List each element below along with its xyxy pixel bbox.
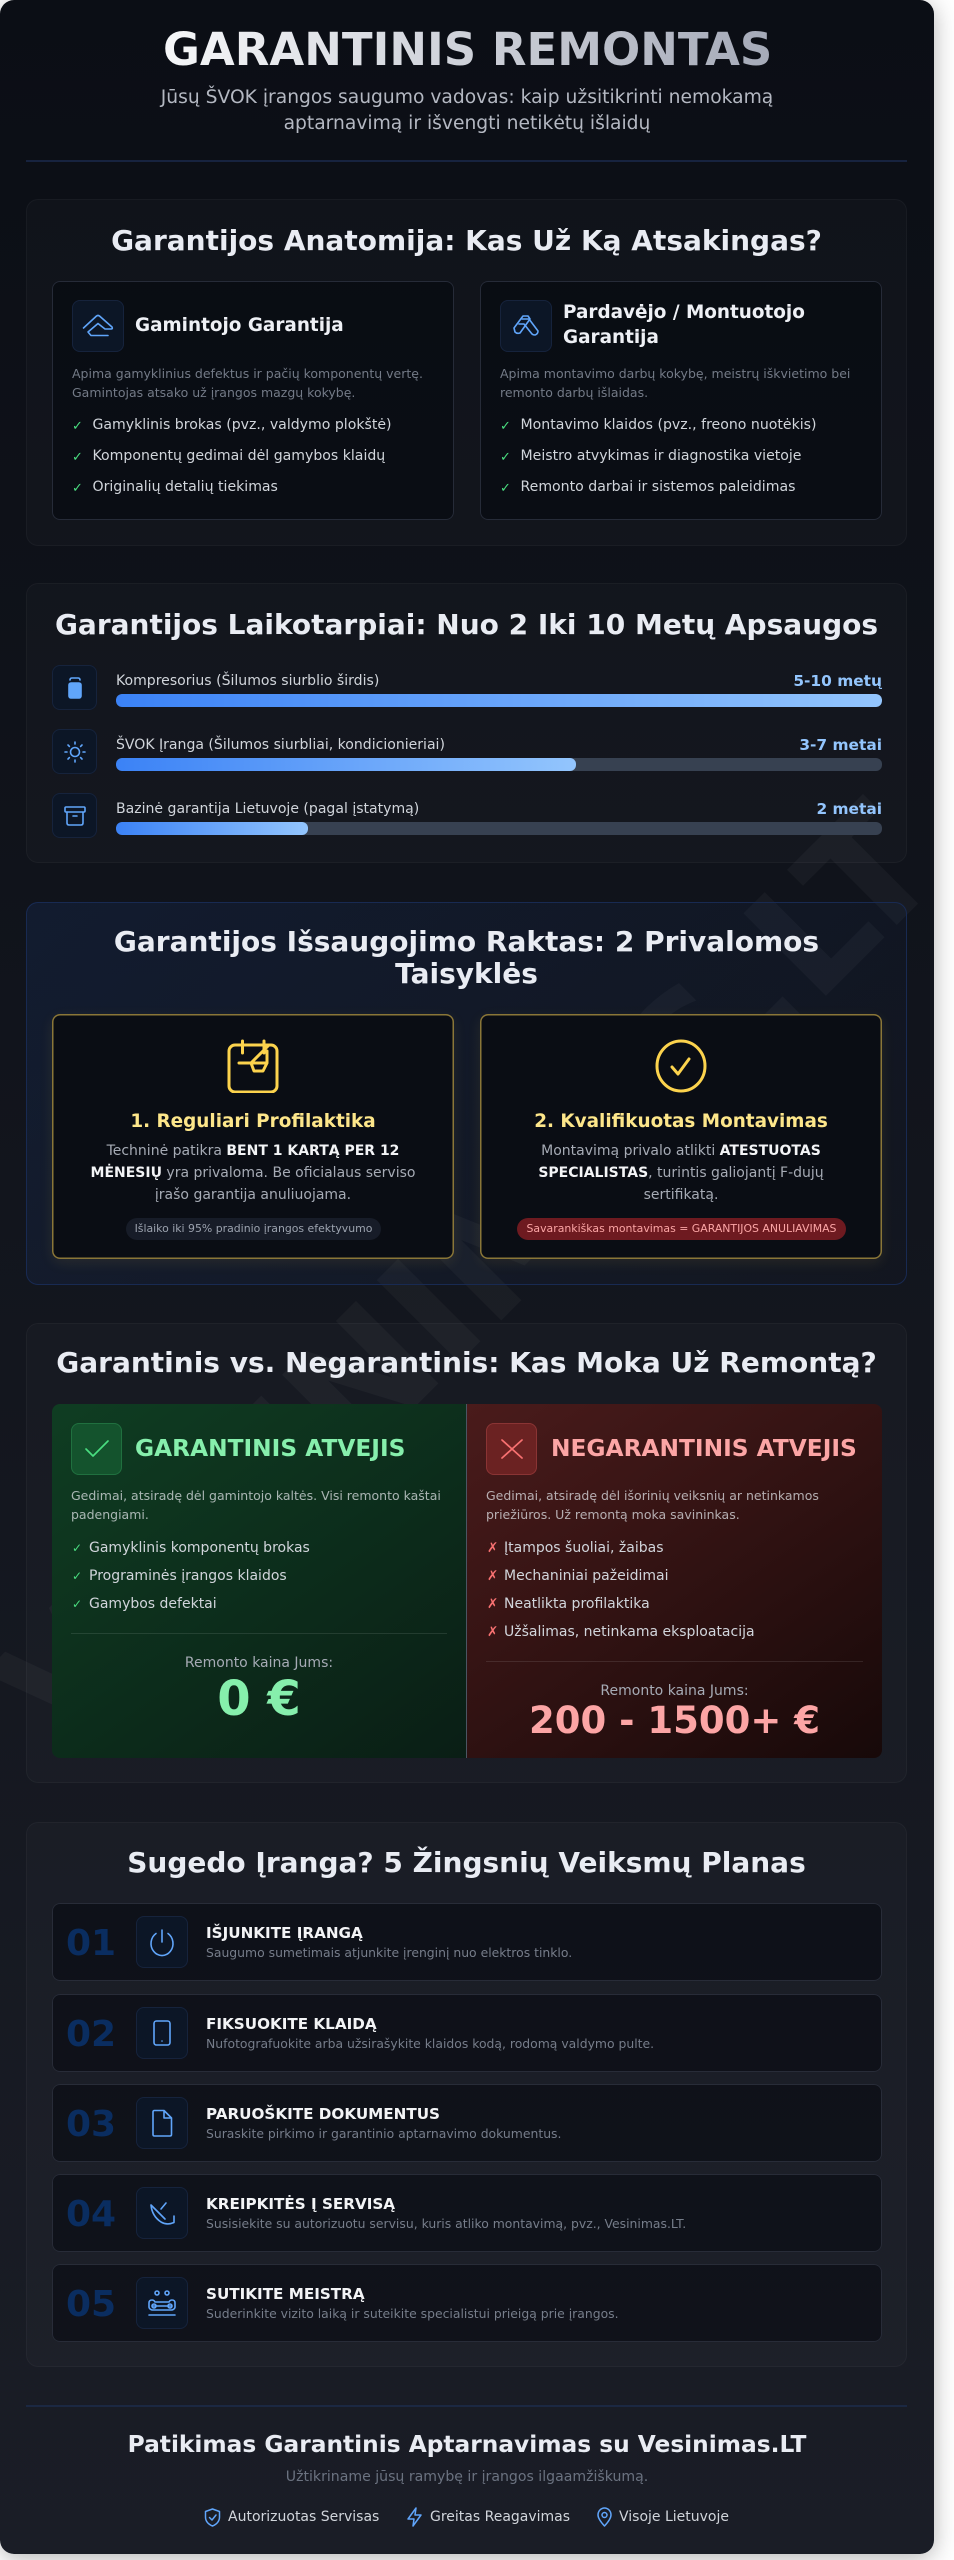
rule text: Montavimą privalo atlikti ATESTUOTAS [541,1143,821,1159]
price: 200 - 1500+ € [529,1699,820,1742]
rule text: Techninė patikra BENT 1 KARTĄ PER 12 [107,1143,399,1159]
rule title: 1. Reguliari Profilaktika [130,1111,376,1132]
step title: PARUOŠKITE DOKUMENTUS [206,2105,440,2123]
rule text: SPECIALISTAS, turintis galiojantį F-dujų [538,1165,824,1181]
price: 0 € [217,1671,301,1727]
bar [116,822,882,834]
item: ✓ [72,1597,82,1611]
footer badge: all of Lithuania [597,2507,729,2527]
card title [563,302,805,348]
description: Apima montavimo darbų kokybę, meistrų iškvietimo bei [500,366,850,381]
icon: lightning [407,2507,422,2527]
check item: ✓ [500,450,511,465]
check item: ✓ [500,419,511,434]
rule text: MĖNESIŲ yra privaloma. Be oficialaus serviso [91,1165,415,1181]
step text: Susisiekite su autorizuotu servisu, kuris atliko montavimą, pvz., Vesinimas.LT. [206,2216,686,2231]
pill note: Išlaiko iki 95% pradinio įrangos efektyvumo [135,1222,372,1235]
footer subtitle: Užtikriname jūsų ramybę ir įrangos ilgaamžiškumą. [286,2469,648,2485]
icon: phone [136,2007,188,2059]
panel: warranty vs non-warranty [26,1323,907,1783]
icon: technician car [136,2277,188,2329]
check item: Meistro atvykimas ir diagnostika vietoje [520,448,801,464]
column title: NEGARANTINIS ATVEJIS [551,1435,857,1462]
icon: check circle [656,1040,706,1092]
card: manufacturer warranty [52,281,454,520]
step text: Suraskite pirkimo ir garantinio aptarnavimo dokumentus. [206,2126,561,2141]
rule text [538,1143,824,1203]
value: 3-7 metai [799,736,882,754]
item text: Mechaniniai pažeidimai [504,1568,668,1584]
header title: GARANTINIS REMONTAS [163,23,772,76]
icon: sun [52,729,97,774]
icon: archive box [52,793,97,838]
badge text: Visoje Lietuvoje [619,2509,729,2525]
header subtitle: aptarnavimą ir išvengti netikėtų išlaidų [284,113,650,134]
price label: Remonto kaina Jums: [185,1655,333,1671]
check item: ✓ [72,419,83,434]
icon: installer [500,300,552,352]
description [72,366,423,400]
icon: compressor [52,665,97,710]
footer divider [26,2405,907,2407]
item text: Įtampos šuoliai, žaibas [504,1540,664,1556]
footer badge: authorized [204,2508,379,2527]
description [486,1488,819,1522]
icon: cross [486,1423,537,1475]
description: priežiūros. Už remontą moka savininkas. [486,1507,740,1522]
bar [116,694,882,706]
step 4 [52,2174,882,2252]
panel: five-step action plan [26,1822,907,2367]
item: ✗ [487,1568,498,1584]
step text: Nufotografuokite arba užsirašykite klaidos kodą, rodomą valdymo pulte. [206,2036,654,2051]
step 1 [52,1903,882,1981]
heading: Taisyklės [395,957,538,990]
check item: Komponentų gedimai dėl gamybos klaidų [92,448,385,464]
header subtitle: Jūsų ŠVOK įrangos saugumo vadovas: kaip užsitikrinti nemokamą [161,87,773,108]
step 3 [52,2084,882,2162]
check item: ✓ [72,450,83,465]
description: Apima gamyklinius defektus ir pačių komponentų vertę. [72,366,423,381]
price divider [486,1661,863,1662]
item: ✓ [72,1541,82,1555]
icon: shield [204,2508,220,2527]
pill warning [517,1218,846,1240]
pill note [126,1218,381,1240]
column title: GARANTINIS ATVEJIS [135,1435,405,1462]
description: Gedimai, atsiradę dėl išorinių veiksnių ar netinkamos [486,1488,819,1503]
description: remonto darbų išlaidas. [500,385,648,400]
card: rule 1 [52,1014,454,1259]
badge text: Greitas Reagavimas [430,2509,570,2525]
icon: manufacturer [72,300,124,352]
icon: check [71,1423,122,1475]
check item: ✓ [500,481,511,496]
description [71,1488,441,1522]
item: ✓ [72,1569,82,1583]
check item: ✓ [72,481,83,496]
price label: Remonto kaina Jums: [600,1683,749,1699]
heading: Garantijos Anatomija: Kas Už Ką Atsakingas? [111,224,822,257]
step title: KREIPKITĖS Į SERVISĄ [206,2195,395,2213]
description: Gamintojas atsako už įrangos mazgų kokybę. [72,385,355,400]
heading [114,925,819,990]
footer badge: fast response [407,2507,570,2527]
step number: 05 [66,2284,116,2325]
step number: 02 [66,2014,116,2055]
step number: 03 [66,2104,116,2145]
icon: document [136,2097,188,2149]
icon: location pin [597,2507,612,2527]
step 5 [52,2264,882,2342]
card title: Gamintojo Garantija [135,315,344,336]
column separator [466,1404,467,1758]
card: installer warranty [480,281,882,520]
check item: Remonto darbai ir sistemos paleidimas [520,479,795,495]
heading: Garantijos Išsaugojimo Raktas: 2 Privalomos [114,925,819,958]
header subtitle [160,86,773,134]
step 2 [52,1994,882,2072]
heading: Garantijos Laikotarpiai: Nuo 2 Iki 10 Metų Apsaugos [55,608,878,641]
panel: two mandatory rules [26,902,907,1285]
item text: Užšalimas, netinkama eksploatacija [504,1624,755,1640]
item text: Neatlikta profilaktika [504,1596,650,1612]
check item: Gamyklinis brokas (pvz., valdymo plokštė) [92,417,392,433]
value: 2 metai [816,800,882,818]
heading: Garantinis vs. Negarantinis: Kas Moka Už Remontą? [56,1346,877,1379]
item: ✗ [487,1624,498,1640]
rule text [91,1143,415,1203]
card title: Pardavėjo / Montuotojo [563,302,805,323]
rule text: sertifikatą. [644,1187,718,1203]
comparison block [52,1404,882,1758]
column: warranty case [52,1404,466,1758]
price divider [71,1633,447,1634]
bar [116,758,882,770]
card title: Garantija [563,326,659,348]
label: ŠVOK Įranga (Šilumos siurbliai, kondicionieriai) [116,737,445,753]
panel: warranty anatomy [26,199,907,546]
description: padengiami. [71,1507,149,1522]
value: 5-10 metų [793,672,882,690]
badge text: Autorizuotas Servisas [228,2509,379,2525]
step title: SUTIKITE MEISTRĄ [206,2285,365,2303]
icon: satellite dish [136,2187,188,2239]
check item: Montavimo klaidos (pvz., freono nuotėkis) [520,417,816,433]
item text: Gamyklinis komponentų brokas [89,1540,310,1556]
step number: 04 [66,2194,116,2235]
label: Kompresorius (Šilumos siurblio širdis) [116,673,379,689]
step number: 01 [66,1923,116,1964]
item: ✗ [487,1540,498,1556]
footer heading: Patikimas Garantinis Aptarnavimas su Vesinimas.LT [128,2431,806,2458]
item text: Gamybos defektai [89,1596,217,1612]
icon: power [136,1916,188,1968]
panel: warranty periods [26,583,907,863]
label: Bazinė garantija Lietuvoje (pagal įstatymą) [116,801,419,817]
step title: FIKSUOKITE KLAIDĄ [206,2015,377,2033]
rule text: įrašo garantija anuliuojama. [155,1187,351,1203]
step text: Suderinkite vizito laiką ir suteikite specialistui prieigą prie įrangos. [206,2306,619,2321]
column: non-warranty case [467,1404,882,1758]
description: Gedimai, atsiradę dėl gamintojo kaltės. Visi remonto kaštai [71,1488,441,1503]
card: rule 2 [480,1014,882,1259]
description [500,366,850,400]
step text: Saugumo sumetimais atjunkite įrenginį nuo elektros tinklo. [206,1945,572,1960]
header divider [26,160,907,162]
step title: IŠJUNKITE ĮRANGĄ [206,1924,363,1942]
item: ✗ [487,1596,498,1612]
pill warning: Savarankiškas montavimas = GARANTIJOS ANULIAVIMAS [527,1222,836,1235]
heading: Sugedo Įranga? 5 Žingsnių Veiksmų Planas [127,1846,806,1879]
check item: Originalių detalių tiekimas [92,479,278,495]
item text: Programinės įrangos klaidos [89,1568,287,1584]
icon: calendar with pen [228,1040,278,1093]
rule title: 2. Kvalifikuotas Montavimas [534,1111,828,1132]
